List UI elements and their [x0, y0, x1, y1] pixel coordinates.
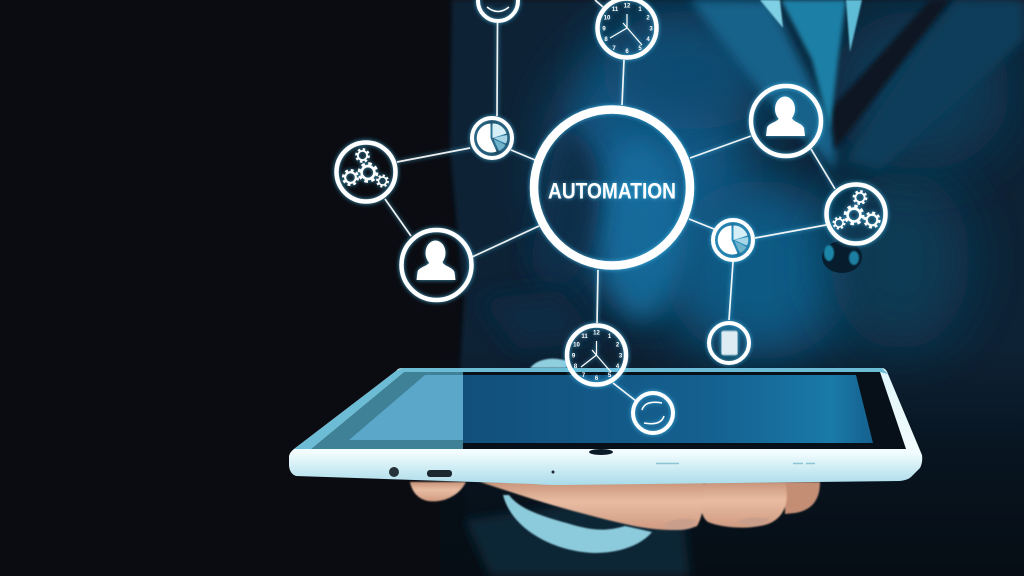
- node: person right: [751, 86, 821, 156]
- node: refresh top: [478, 0, 518, 21]
- node: pie right: [713, 220, 753, 260]
- node: clock bottom: 11: [581, 334, 588, 340]
- node: clock top: 12: [624, 4, 631, 10]
- label: automation: AUTOMATION: [548, 178, 676, 204]
- node: clock bottom: 2: [616, 342, 620, 348]
- photo: hand: [410, 482, 820, 530]
- tablet audio jack: [389, 467, 399, 477]
- node: clock bottom: 9: [572, 354, 576, 360]
- tablet screen right: [463, 375, 873, 443]
- node: clock top: 10: [604, 16, 611, 22]
- tablet: [289, 368, 922, 485]
- node: clock top: 4: [646, 37, 650, 43]
- node: clock top: 11: [612, 7, 619, 13]
- tablet mic hole: [552, 470, 554, 474]
- node: clock bottom: 4: [616, 364, 620, 370]
- node: clock top: 2: [646, 16, 650, 22]
- node: clock top: 7: [612, 46, 616, 52]
- node: clock bottom: 1: [608, 334, 612, 340]
- node: clock bottom: 5: [608, 373, 612, 379]
- node: clock top: 5: [638, 46, 642, 52]
- node: clock top: 1: [638, 7, 642, 13]
- node: clock bottom: [567, 326, 626, 384]
- node: clock bottom: 10: [573, 342, 580, 348]
- connector lines: [385, 0, 835, 401]
- node: clock bottom: 8: [574, 364, 578, 370]
- tablet camera: [589, 449, 613, 455]
- tablet top edge: [294, 368, 888, 449]
- node: refresh bottom: [633, 393, 673, 433]
- tablet bezel left: [311, 372, 463, 449]
- tablet bezel right: [463, 372, 906, 449]
- tablet usb port: [427, 470, 452, 477]
- node: clock top: 8: [604, 37, 608, 43]
- node: clock bottom: 6: [595, 376, 599, 382]
- node: clock top: [598, 0, 656, 58]
- photo: shirt cuff: [503, 359, 652, 553]
- node: gears right: [826, 184, 886, 244]
- node: gears left: [336, 142, 396, 202]
- node: clock top: 9: [602, 26, 606, 32]
- photo: suit jacket: [440, 0, 1024, 576]
- node: clock bottom: 3: [619, 354, 623, 360]
- node: person left: [402, 230, 472, 300]
- photo: jacket button: [822, 241, 862, 273]
- node: clock top: 6: [625, 49, 629, 55]
- node: phone: [709, 323, 749, 363]
- node: clock bottom: 12: [593, 330, 600, 336]
- tablet rim and body: [289, 368, 922, 485]
- tablet speaker marks: [656, 462, 815, 464]
- node: pie left: [472, 118, 512, 158]
- automation network: [336, 0, 886, 433]
- node: clock bottom: 7: [582, 373, 586, 379]
- node: clock top: 3: [649, 26, 653, 32]
- tablet screen left: [349, 375, 463, 440]
- central ring with label: [534, 110, 690, 266]
